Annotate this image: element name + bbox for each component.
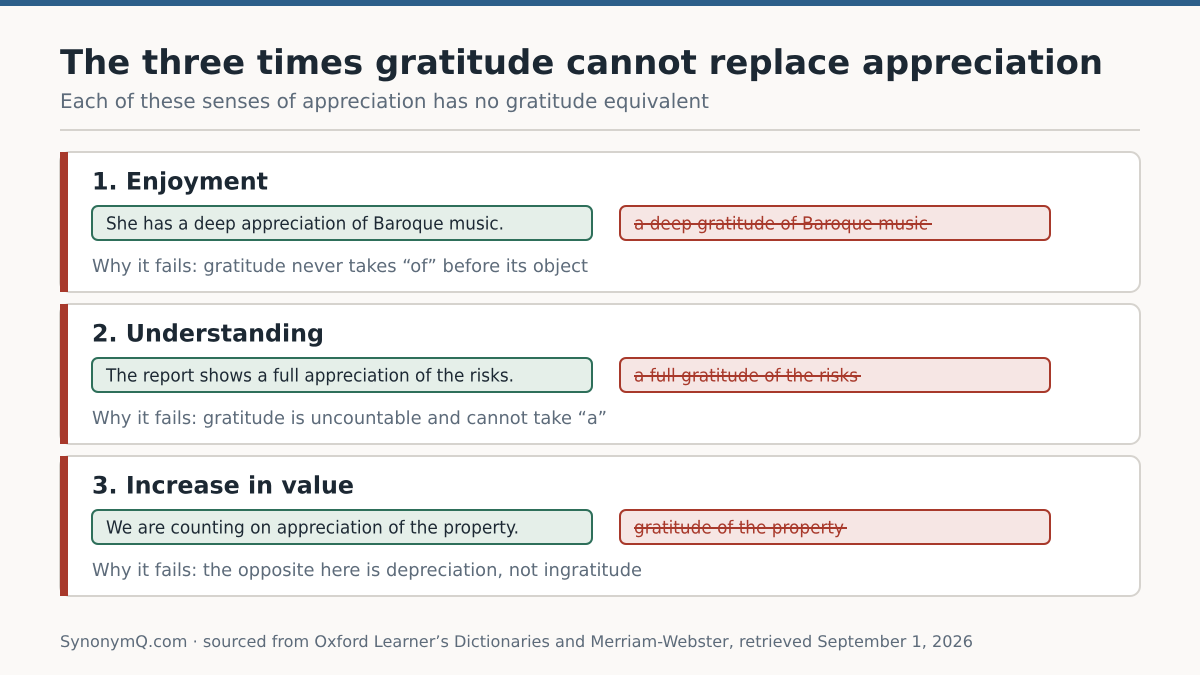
incorrect example: gratitude of the property — [634, 518, 844, 538]
correct example — [92, 358, 592, 392]
explanation: Why it fails: the opposite here is depreciation, not ingratitude — [92, 560, 642, 581]
correct example — [92, 510, 592, 544]
top accent bar — [0, 0, 1200, 6]
incorrect example — [620, 358, 1050, 392]
incorrect example — [620, 206, 1050, 240]
incorrect example: a full gratitude of the risks — [634, 366, 858, 386]
heading: enjoyment: 1. Enjoyment — [92, 168, 268, 196]
correct example — [92, 206, 592, 240]
title: The three times gratitude cannot replace appreciation — [60, 43, 1103, 83]
explanation: Why it fails: gratitude never takes “of” before its object — [92, 256, 588, 277]
panel: enjoyment — [60, 152, 1140, 292]
incorrect example: a deep gratitude of Baroque music — [634, 214, 928, 234]
correct example: The report shows a full appreciation of the risks. — [105, 366, 514, 386]
correct example: She has a deep appreciation of Baroque music. — [106, 214, 504, 234]
subtitle: Each of these senses of appreciation has no gratitude equivalent — [60, 89, 709, 113]
incorrect example — [620, 510, 1050, 544]
source footer: SynonymQ.com · sourced from Oxford Learner’s Dictionaries and Merriam-Webster, retrieved September 1, 2026 — [60, 632, 973, 651]
panel: understanding — [60, 304, 1140, 444]
heading: understanding: 2. Understanding — [92, 320, 324, 348]
heading: increase in value: 3. Increase in value — [92, 472, 354, 500]
correct example: We are counting on appreciation of the property. — [106, 518, 519, 538]
panel: increase in value — [60, 456, 1140, 596]
explanation: Why it fails: gratitude is uncountable and cannot take “a” — [92, 408, 607, 429]
